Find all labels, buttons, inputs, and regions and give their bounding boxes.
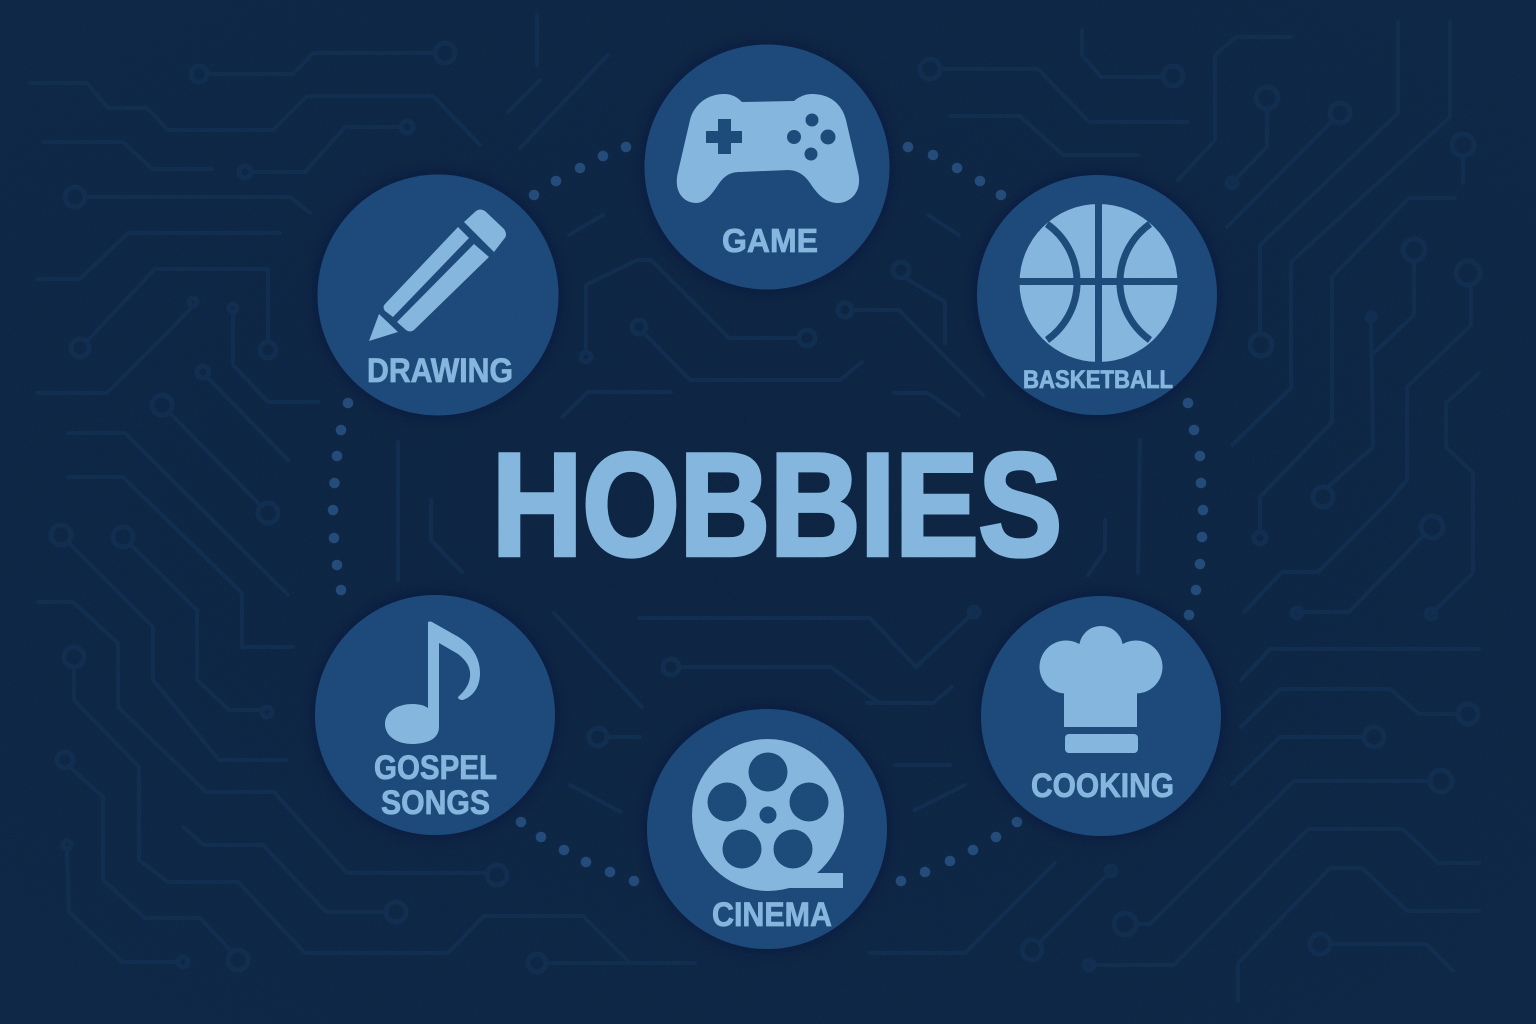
panel: game: [644, 44, 890, 290]
icon: pencil: [369, 210, 506, 341]
panel: gospel songs: [315, 595, 555, 835]
label: gospel songs: [374, 749, 497, 822]
panel: basketball: [977, 175, 1217, 415]
icon: film reel: [692, 739, 844, 891]
panel: cinema: [647, 709, 887, 949]
label: cinema: CINEMA: [712, 896, 832, 934]
icon: music note: [385, 622, 480, 744]
label: drawing: DRAWING: [367, 352, 513, 390]
title: HOBBIES: [492, 423, 1062, 586]
panel: cooking: [981, 596, 1221, 836]
label: game: GAME: [722, 222, 818, 259]
label: basketball: BASKETBALL: [1023, 366, 1173, 394]
icon: game controller: [677, 94, 859, 203]
label: gospel songs: GOSPEL: [374, 749, 497, 787]
icon: chef hat: [1040, 626, 1162, 753]
panel: drawing: [318, 174, 558, 416]
dotted ring connecting the hobbies: [328, 142, 1208, 886]
label: gospel songs: SONGS: [381, 784, 490, 822]
icon: basketball: [1015, 200, 1182, 366]
label: cooking: COOKING: [1031, 767, 1174, 805]
